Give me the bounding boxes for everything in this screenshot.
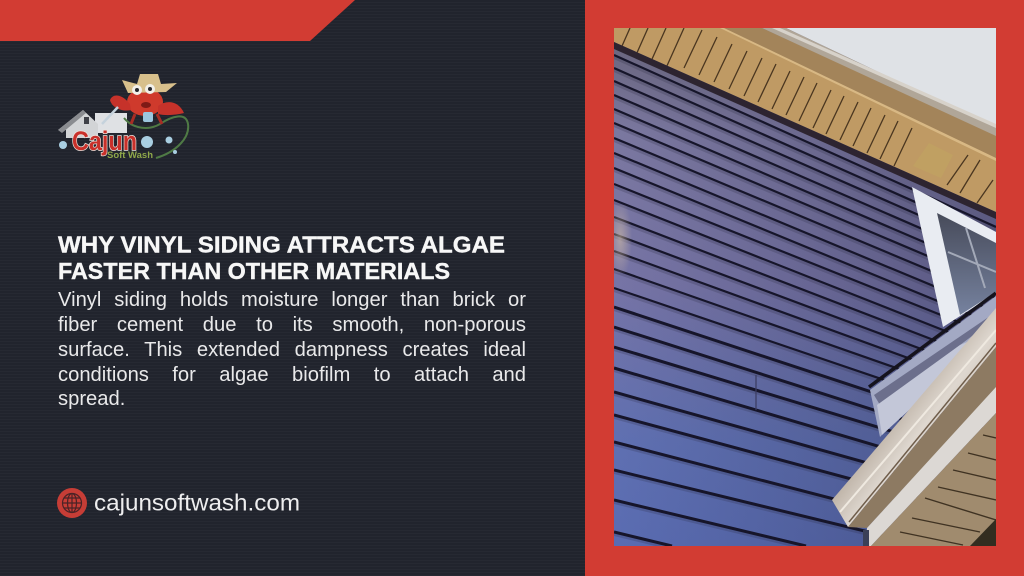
soffit vent bbox=[913, 143, 953, 178]
window bbox=[912, 187, 996, 327]
body text bbox=[58, 289, 526, 410]
icon: globe bbox=[57, 488, 87, 518]
heading: FASTER THAN OTHER MATERIALS bbox=[58, 258, 450, 284]
gable wall and roof edge bbox=[869, 293, 996, 437]
lower soffit bbox=[871, 413, 996, 546]
logo word: Soft Wash: Soft Wash bbox=[107, 150, 153, 160]
body text: Vinyl siding holds moisture longer than brick or bbox=[58, 289, 526, 311]
body text: surface. This extended dampness creates ideal bbox=[58, 339, 526, 361]
icon: crab mascot with hat bbox=[102, 74, 184, 124]
heading bbox=[58, 232, 505, 284]
icon: bubbles bbox=[59, 136, 177, 154]
panel: red banner top left bbox=[0, 0, 355, 41]
icon: green hose bbox=[124, 116, 188, 158]
gutter bbox=[832, 308, 996, 528]
icon: house bbox=[58, 110, 127, 138]
logo word: Cajun: Cajun bbox=[72, 126, 137, 156]
fascia and roof trim bbox=[720, 28, 996, 161]
white trim bbox=[866, 387, 996, 546]
sky bbox=[786, 28, 996, 128]
logo: Cajun Soft Wash bbox=[58, 74, 190, 160]
heading: WHY VINYL SIDING ATTRACTS ALGAE bbox=[58, 232, 505, 258]
website footer bbox=[57, 488, 300, 518]
siding wall bbox=[614, 28, 996, 548]
soffit with slats bbox=[614, 28, 996, 219]
website address: cajunsoftwash.com bbox=[94, 490, 300, 516]
body text: fiber cement due to its smooth, non-porous bbox=[58, 314, 526, 336]
photo: vinyl siding house wall bbox=[614, 28, 996, 546]
panel: dark background bbox=[0, 0, 585, 576]
panel: red photo frame bbox=[585, 0, 1024, 576]
corner post under gutter bbox=[863, 530, 869, 546]
body text: conditions for algae biofilm to attach and bbox=[58, 364, 526, 386]
body text: spread. bbox=[58, 388, 125, 410]
